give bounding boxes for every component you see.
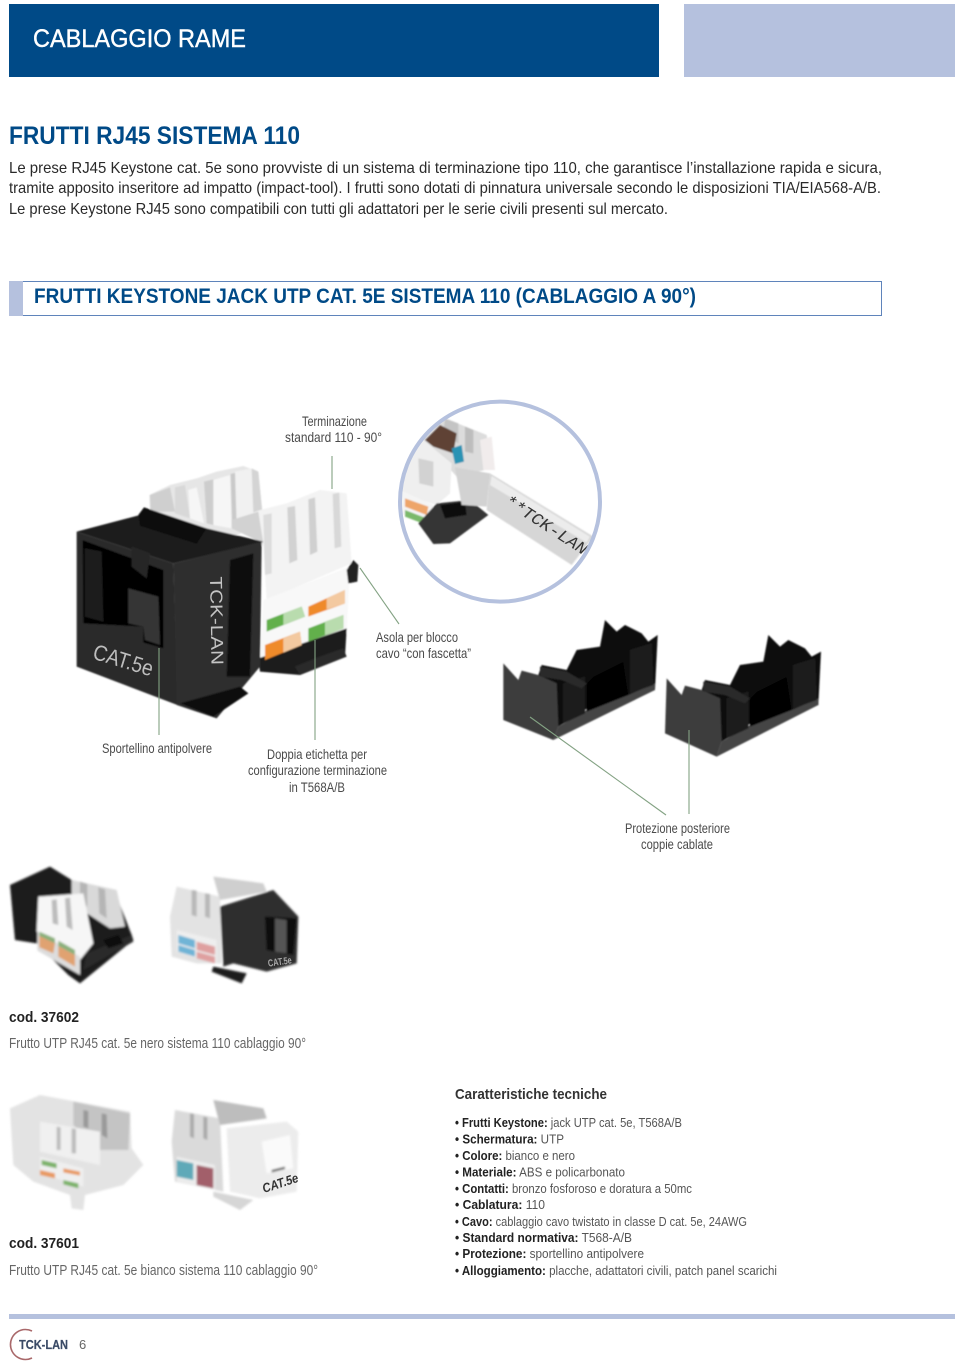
cable marking text: **TCK-LAN — [500, 492, 590, 560]
callout: Protezione posteriore: Protezione posteriore — [625, 820, 730, 836]
callout: Asola: Asola per blocco — [376, 629, 458, 645]
specifications panel: • Cavo: cablaggio cavo twistato in classe D cat. 5e, 24AWG — [455, 1214, 747, 1229]
callout: Doppia etichetta: configurazione terminazione — [248, 762, 387, 778]
callout: Sportellino — [102, 648, 212, 756]
callout: Doppia etichetta: in T568A/B — [289, 779, 345, 795]
photo: rear protection pieces — [503, 620, 821, 757]
specifications panel: • Colore: bianco e nero — [455, 1148, 575, 1163]
text: description 37602: Frutto UTP RJ45 cat. 5e nero sistema 110 cablaggio 90° — [9, 1035, 306, 1052]
intro paragraph: Le prese RJ45 Keystone cat. 5e sono provviste di un sistema di terminazione tipo 110, che garantisce l’installazione rapida e sicura, — [9, 160, 882, 177]
section heading box: FRUTTI KEYSTONE JACK UTP CAT. 5E SISTEMA 110 (CABLAGGIO A 90°) — [34, 285, 696, 308]
label on black jack: CAT.5e: CAT.5e — [267, 955, 293, 970]
main heading: FRUTTI RJ45 SISTEMA 110 — [9, 122, 300, 150]
footer logo: TCK-LAN — [19, 1338, 68, 1352]
inset circle: cable detail — [400, 402, 600, 602]
photo: black jacks — [10, 867, 298, 983]
text: description 37601: Frutto UTP RJ45 cat. 5e bianco sistema 110 cablaggio 90° — [9, 1262, 318, 1279]
photo: white jacks — [10, 1095, 298, 1210]
specifications panel: • Cablatura: 110 — [455, 1197, 545, 1212]
intro paragraph: tramite apposito inseritore ad impatto (impact-tool). I frutti sono dotati di pinnatura universale secondo le disposizioni TIA/EIA568-A/B. — [9, 180, 881, 197]
text: cod. 37601: cod. 37601 — [9, 1235, 79, 1252]
photo: main black keystone jack — [77, 466, 358, 718]
callout: Doppia etichetta — [248, 640, 387, 795]
header title: CABLAGGIO RAME — [33, 25, 246, 53]
specifications panel: • Alloggiamento: placche, adattatori civili, patch panel scarichi — [455, 1263, 777, 1278]
footer rule — [9, 1314, 955, 1319]
specifications panel: • Protezione: sportellino antipolvere — [455, 1246, 644, 1261]
section heading box — [9, 281, 882, 316]
page number: 6 — [79, 1337, 86, 1352]
label on jack: TCK-LAN: TCK-LAN — [206, 576, 228, 665]
callout: Asola: cavo “con fascetta” — [376, 645, 471, 661]
callout: Sportellino: Sportellino antipolvere — [102, 740, 212, 756]
callout: Doppia etichetta: Doppia etichetta per — [267, 746, 367, 762]
specifications panel — [455, 1086, 777, 1278]
header bar — [9, 4, 659, 77]
callout: Terminazione standard: standard 110 - 90° — [285, 429, 382, 445]
text: CAT.5e on white jack: CAT.5e — [260, 1170, 300, 1196]
footer logo — [10, 1330, 68, 1360]
label on jack: CAT.5e: CAT.5e — [90, 639, 156, 681]
protection piece left — [503, 620, 658, 740]
specifications panel: • Standard normativa: T568-A/B — [455, 1230, 632, 1245]
specifications panel: • Contatti: bronzo fosforoso e doratura a 50mc — [455, 1181, 692, 1196]
intro paragraph — [9, 160, 882, 218]
callout: Terminazione standard: Terminazione — [302, 413, 367, 429]
callout: Terminazione standard — [285, 413, 382, 489]
header side block — [684, 4, 955, 77]
specifications panel: • Materiale: ABS e policarbonato — [455, 1164, 625, 1180]
intro paragraph: Le prese Keystone RJ45 sono compatibili con tutti gli adattatori per le serie civili presenti sul mercato. — [9, 201, 668, 218]
callout: Protezione posteriore — [530, 717, 730, 852]
text: cod. 37602: cod. 37602 — [9, 1009, 79, 1026]
protection piece right — [665, 635, 821, 757]
callout: Protezione posteriore: coppie cablate — [641, 836, 713, 852]
specifications panel: • Schermatura: UTP — [455, 1132, 564, 1146]
specifications panel: • Frutti Keystone: jack UTP cat. 5e, T568A/B — [455, 1115, 682, 1130]
specifications heading: Caratteristiche tecniche — [455, 1086, 607, 1103]
callout: Asola — [360, 568, 471, 661]
